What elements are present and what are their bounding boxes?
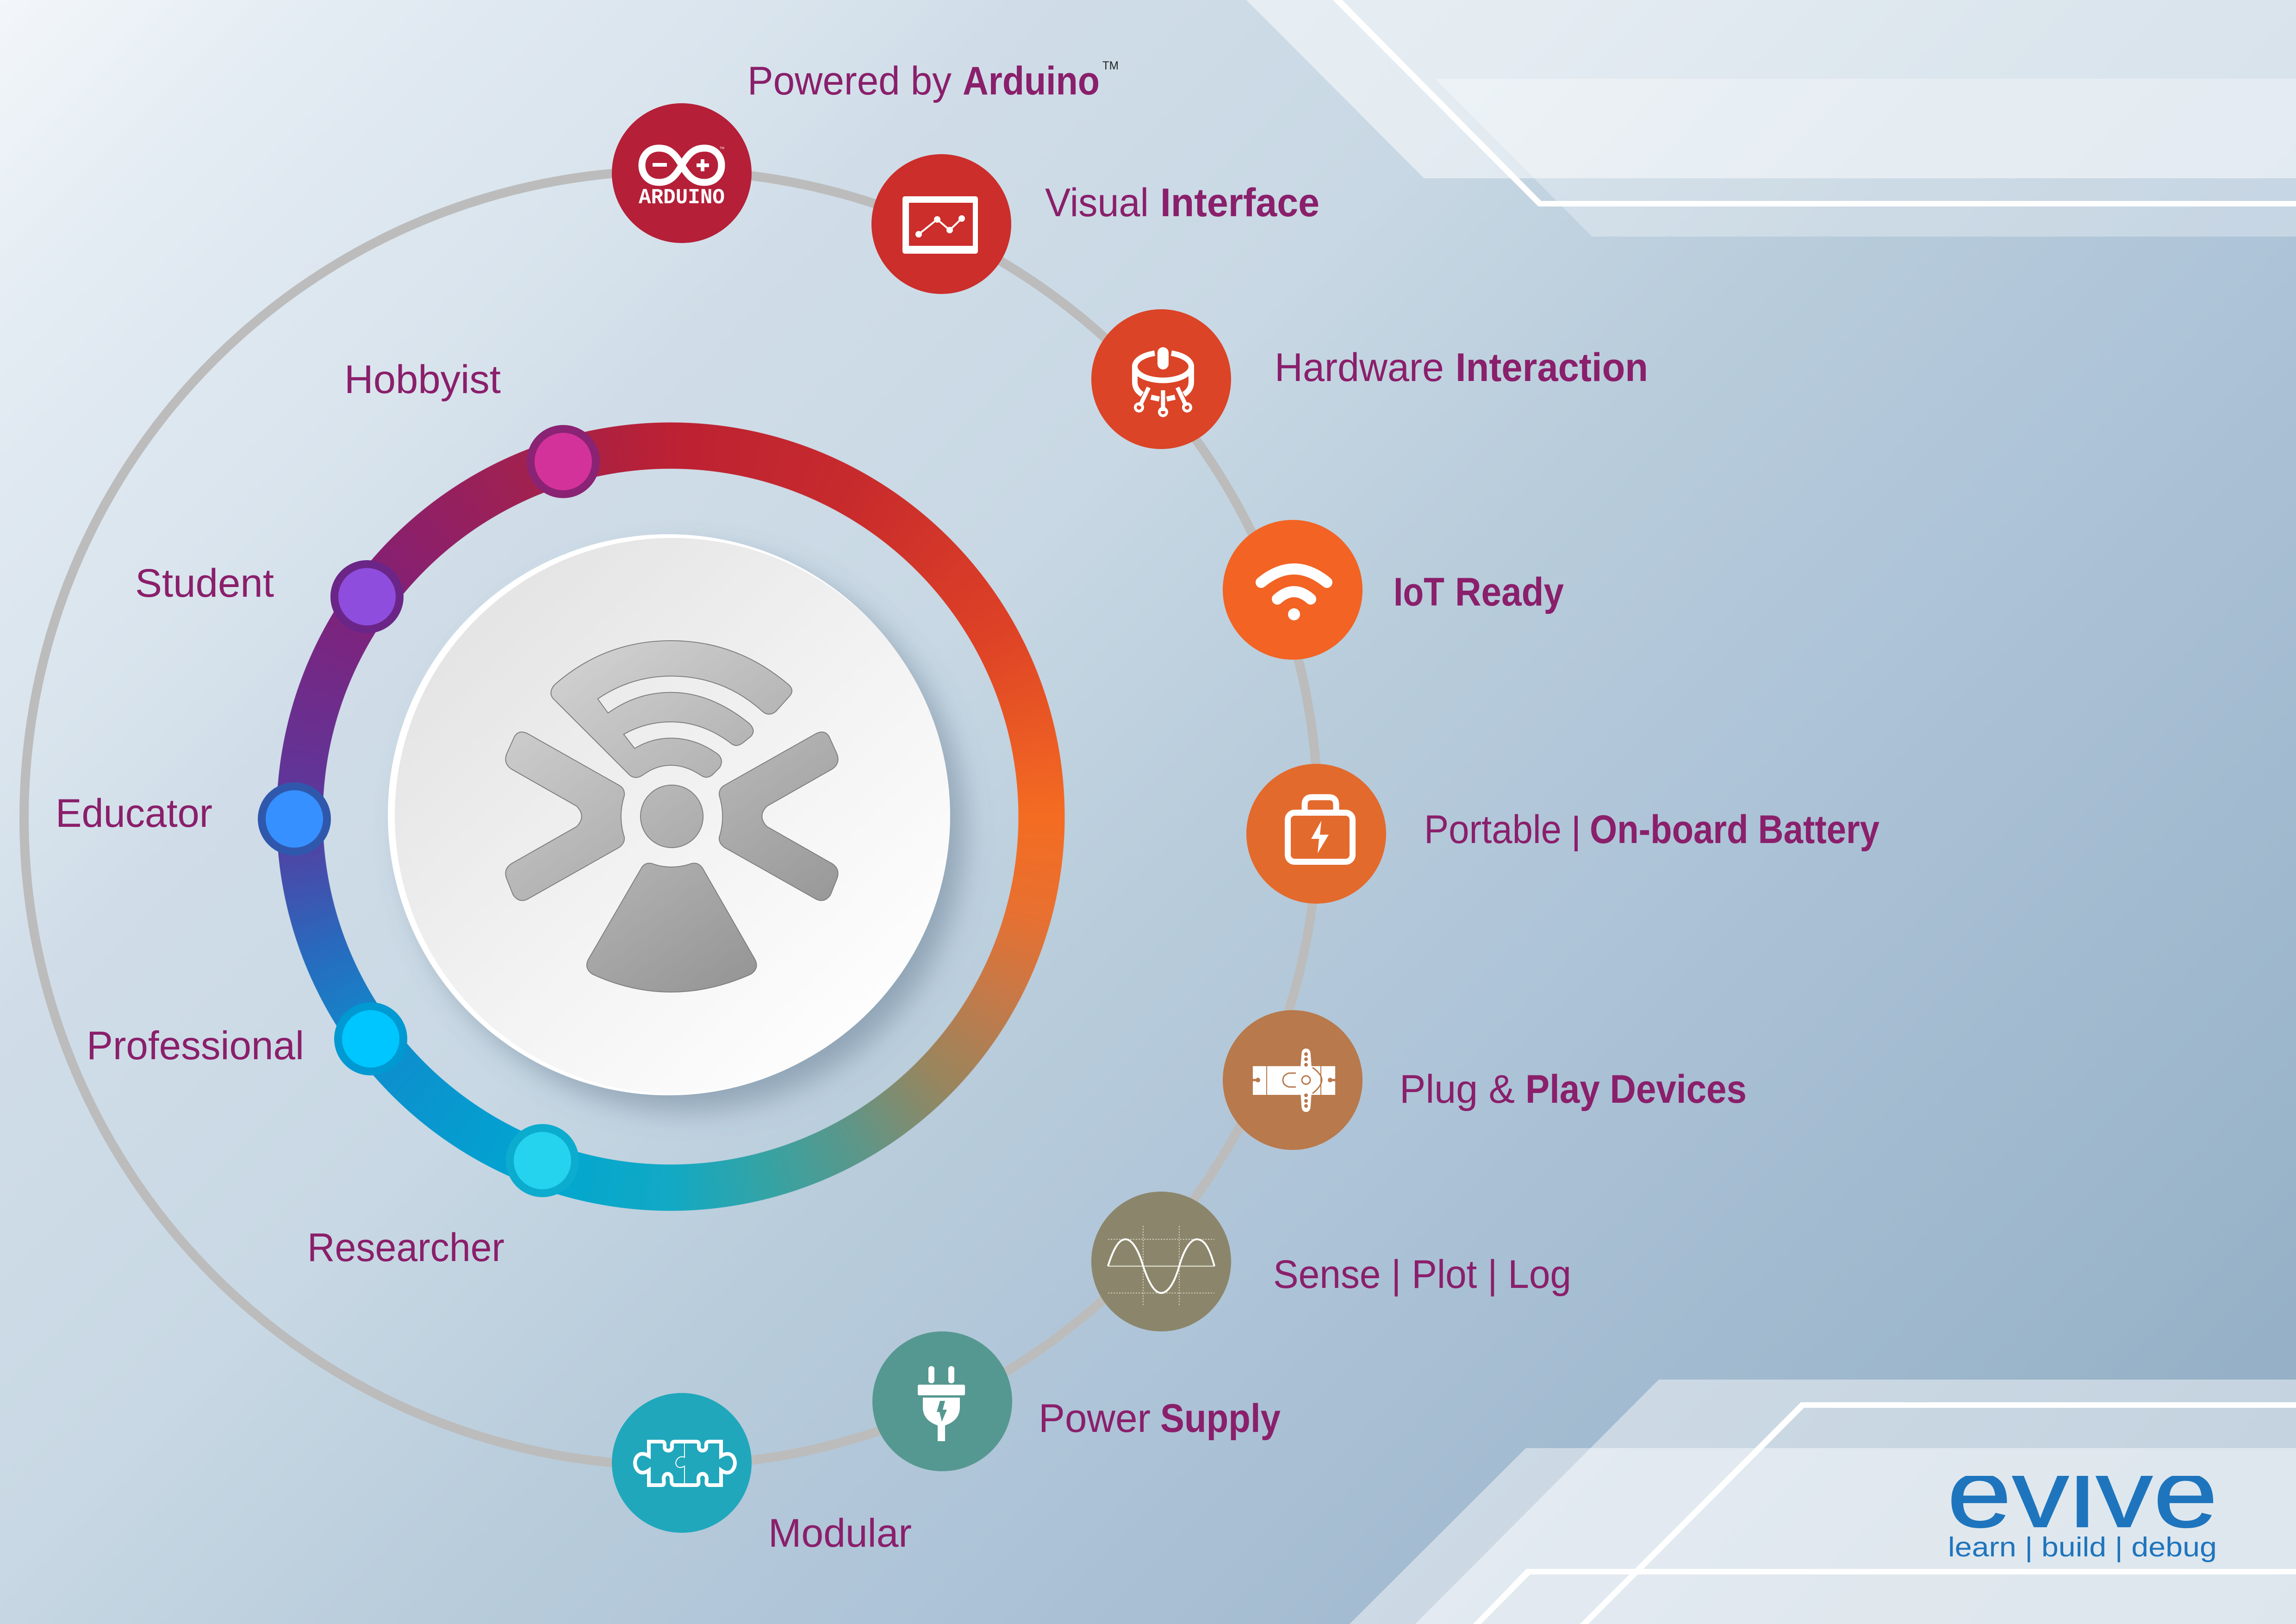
icon: plug [918, 1366, 965, 1441]
outer grey orbit ring [24, 171, 1318, 1465]
label [747, 59, 1119, 103]
feature: Portable On-board Battery [1246, 764, 1879, 904]
label: Interaction [1456, 345, 1648, 390]
icon: potentiometer [1135, 347, 1191, 416]
evive logo [1950, 1476, 2215, 1562]
feature: Power Supply [872, 1331, 1281, 1471]
label: Power [1039, 1396, 1151, 1441]
ring marker: Student [334, 564, 400, 630]
ring marker: Professional [338, 1006, 404, 1071]
ring marker: Researcher [510, 1128, 575, 1193]
icon: servo motor [1253, 1049, 1335, 1112]
feature: Powered by Arduino [612, 59, 1119, 243]
icon: wifi [1261, 569, 1327, 620]
label [1275, 345, 1648, 390]
ring marker: Hobbyist [530, 429, 596, 494]
label: Hobbyist: Hobbyist [344, 357, 501, 402]
label: Play Devices [1525, 1067, 1747, 1112]
label: Sense | Plot | Log [1273, 1252, 1571, 1297]
label: Portable [1424, 807, 1562, 852]
label: Powered by [747, 59, 952, 103]
bottom right decoration [1350, 1380, 2296, 1624]
label [1045, 181, 1319, 225]
evive logo: evive [1947, 1438, 2218, 1548]
label: On-board Battery [1590, 807, 1879, 852]
label: Arduino [963, 59, 1100, 103]
centre disc with logo [388, 534, 950, 1095]
label: Researcher: Researcher [307, 1225, 504, 1270]
feature: Visual Interface [871, 154, 1319, 294]
top right decoration [1246, 0, 2296, 237]
label: Visual [1045, 181, 1149, 225]
label: Plug & [1400, 1067, 1515, 1112]
icon: chart screen [902, 196, 978, 254]
label: TM [1102, 59, 1119, 72]
icon: arduino infinity logo: TM [720, 147, 724, 150]
label: Ready [1455, 570, 1564, 614]
label [1424, 807, 1879, 852]
label: Professional: Professional [87, 1024, 304, 1068]
label [1400, 1067, 1747, 1112]
label: IoT [1394, 570, 1444, 614]
ring marker: Educator [262, 786, 327, 852]
icon: puzzle pieces [635, 1441, 735, 1485]
icon: battery case [1288, 797, 1352, 862]
icon: arduino infinity logo [639, 147, 725, 210]
label [1394, 570, 1564, 614]
label [1039, 1396, 1281, 1441]
icon: sine wave scope [1108, 1226, 1214, 1306]
evive logo: learn | build | debug [1948, 1532, 2217, 1562]
label: Educator: Educator [56, 791, 212, 836]
icon: arduino infinity logo: ARDUINO [639, 186, 725, 210]
label: Interface [1160, 181, 1319, 225]
feature: Sense Plot Log [1091, 1192, 1571, 1331]
label: Hardware [1275, 345, 1444, 390]
label: Supply [1160, 1396, 1281, 1441]
feature: Plug & Play Devices [1223, 1010, 1747, 1150]
label: Modular [768, 1511, 912, 1555]
feature: Modular [612, 1393, 912, 1555]
label: Student: Student [135, 561, 274, 606]
icon: evive emblem [505, 641, 838, 992]
feature: Hardware Interaction [1091, 309, 1648, 449]
feature: IoT Ready [1223, 520, 1564, 660]
gradient user ring [276, 422, 1065, 1211]
